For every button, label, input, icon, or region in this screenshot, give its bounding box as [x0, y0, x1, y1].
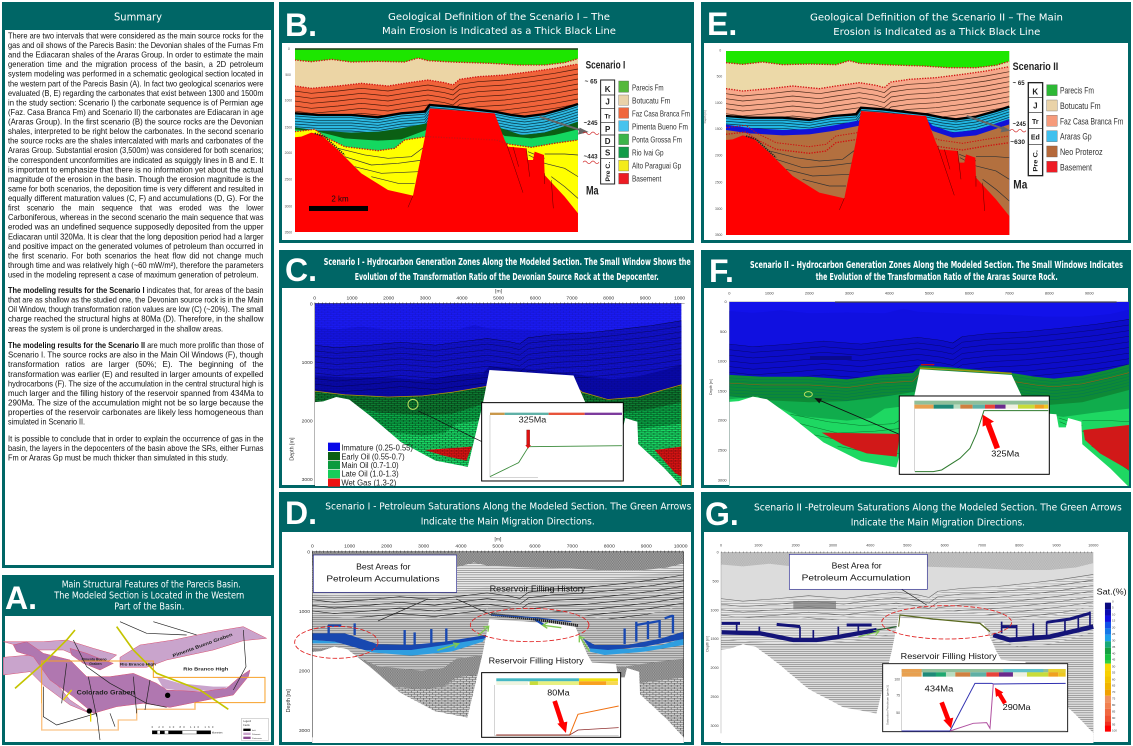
text block: summary paragraph 1: gas and oil shows of the Parecis Basin: the Devonian shales of the Furnas Fm: [8, 41, 264, 50]
map of Parecis Basin: Pimenta Bueno Graben: [172, 632, 233, 658]
overlays on section F: 2000: [718, 418, 727, 423]
overlays on section D: 6000: [529, 544, 541, 550]
legend, scenario II: 1000: [715, 101, 723, 105]
overlays on section C: 0: [310, 301, 313, 307]
overlays on section F: 3000: [845, 291, 855, 296]
overlays on section G: Depth [m]: [706, 636, 710, 652]
text block: summary paragraph 1: magnitude of the erosion in the basin. Though the erosion magnitude is the: [8, 175, 264, 184]
legend, scenario II: 500: [717, 74, 722, 78]
overlays on section D: 7000: [567, 544, 578, 550]
overlays on section F: 1500: [718, 388, 727, 393]
inset: transformation ratio chart C: 325Ma: [519, 414, 546, 424]
heading: panel A: [53, 579, 244, 612]
inset: filling history D: [482, 673, 621, 737]
overlays on section D: Reservoir Filling History: [489, 656, 584, 666]
overlays on section C: 2000: [302, 418, 313, 424]
scale bar and legend, scenario I: Scenario I: [586, 59, 625, 71]
legend, scenario II: Pre C.: [1033, 150, 1040, 172]
overlays on section F: 500: [720, 329, 727, 334]
overlays on section F: 3000: [718, 477, 727, 482]
scale bar and legend, scenario I: Rio Ivai Gp: [632, 147, 664, 157]
overlays on section C: 0: [313, 295, 316, 301]
scale bar and legend, scenario I: 2 km: [331, 195, 349, 204]
legend: saturation colour scale: 50: [1112, 664, 1116, 668]
scale bar and legend, scenario I: Basement: [632, 174, 662, 184]
legend, scenario II: Basement: [1060, 162, 1092, 172]
heading: panel A: Main Structural Features of the Parecis Basin.: [62, 579, 241, 590]
scale bar and legend, scenario I: P: [605, 125, 611, 134]
text block: summary paragraph 1: same for both scenarios, the deposition time is very different and resulted in: [8, 184, 264, 193]
text block: scenario II results: Scenario I. The source rocks are also in the Main Oil Windows (F), though: [8, 351, 264, 360]
overlays on section C: 9000: [640, 295, 651, 301]
text block: scenario I results: charge reached the structural highs at 80Ma (D). Therefore, in the shallow: [8, 315, 264, 324]
heading: panel B: [382, 12, 616, 37]
scale bar and legend, scenario I: J: [605, 98, 610, 107]
inset: filling history G: 434Ma: [925, 684, 954, 694]
reservoir saturation band D: [312, 615, 684, 656]
legend, scenario II: Tr: [1032, 119, 1039, 126]
overlays on section D: 8000: [604, 544, 615, 550]
overlays on section F: 1000: [765, 291, 775, 296]
map of Parecis Basin: kilometers: [212, 732, 223, 735]
scale bar and legend, scenario I: [285, 47, 690, 234]
inset: filling history G: 50: [896, 711, 900, 715]
overlays on section G: Reservoir Filling History: [901, 651, 997, 661]
text block: summary paragraph 1: shales, interpreted to be right below the carbonates. In the second scenario: [8, 127, 264, 136]
legend: maturity: Wet Gas (1.3-2): [341, 479, 397, 488]
text block: summary paragraph 1: system modeling was performed in a schematic geological section located in: [8, 70, 264, 79]
overlays on section G: 8000: [1015, 544, 1023, 548]
overlays on section G: 2500: [711, 695, 719, 699]
text block: summary paragraph 1: Ediacaran until 320Ma. It is clear that the long deposition period had a larger: [8, 232, 264, 241]
legend: saturation colour scale: 70: [1112, 690, 1116, 694]
inset: transformation ratio chart F: 325Ma: [991, 449, 1019, 459]
heading: panel F: [750, 260, 1123, 283]
panel F: generation zones scenario II: [701, 250, 1131, 488]
legend: saturation colour scale: 80: [1112, 703, 1116, 707]
overlays on section F: 0: [724, 299, 727, 304]
panel E: geological definition scenario II: [701, 2, 1131, 242]
legend, scenario II: 3500: [715, 233, 723, 237]
maturity section scenario II: [729, 302, 1129, 486]
overlays on section G: 3000: [829, 544, 837, 548]
reservoir saturation band G: [722, 612, 1093, 640]
scale bar and legend, scenario I: ~ 65: [585, 78, 598, 85]
scale bar and legend, scenario I: Pre C.: [605, 161, 612, 182]
overlays on section G: [706, 544, 1127, 733]
overlays on section C: 6000: [530, 295, 541, 301]
text block: conclusion: [8, 434, 264, 462]
overlays on section F: 9000: [1085, 291, 1095, 296]
panel G: saturations scenario II: [701, 492, 1131, 746]
legend: saturation colour scale: 75: [1112, 697, 1116, 701]
text block: conclusion: It is possible to conclude that in order to explain the occurrence of gas in the: [8, 434, 264, 443]
overlays on section F: 2500: [718, 447, 727, 452]
heading: panel G: Indicate the Main Migration Directions.: [851, 518, 1025, 529]
scale bar and legend, scenario I: Tr: [604, 114, 611, 121]
text block: summary paragraph 1: the correspondent unconformities are indicated as squiggly lines in B and E. It: [8, 156, 264, 165]
inset: filling history G: [883, 664, 1068, 732]
dashed best-area ellipse G: [882, 606, 1012, 639]
text block: summary paragraph 1: the first scenario. For both scenarios the heat flow did not change much: [8, 251, 264, 260]
dashed best-area ellipses D: [295, 608, 589, 658]
text block: summary paragraph 1: (Araras Group). In the first scenario (B) the source rocks are the Devonian: [8, 118, 264, 127]
legend: saturation colour scale: 0: [1112, 599, 1114, 603]
legend: saturation colour scale: 15: [1112, 619, 1116, 623]
text block: summary paragraph 1: equally different maturation values (C, F) and accumulations (D, G). For the: [8, 194, 264, 203]
text block: summary paragraph 1: is important to emphasize that there is no information yet about the actual: [8, 165, 264, 174]
map of Parecis Basin: fault: [252, 729, 256, 732]
panel letter B: B.: [285, 7, 317, 43]
overlays on section F: 7000: [1005, 291, 1015, 296]
scale bar and legend, scenario I: Faz Casa Branca Fm: [632, 109, 690, 119]
heading: panel E: Geological Definition of the Scenario II – The Main: [810, 13, 1063, 24]
scale bar and legend, scenario I: Ponta Grossa Fm: [632, 135, 682, 145]
overlays on section D: Depth [m]: [286, 689, 292, 712]
heading: panel D: [325, 502, 691, 527]
legend: saturation colour scale: 55: [1112, 671, 1116, 675]
overlays on section G: 0: [717, 550, 719, 554]
overlays on section C: 7000: [566, 295, 578, 301]
callout: best area G: Best Area for: [832, 560, 882, 570]
inset: filling history D: 80Ma: [547, 688, 570, 698]
map of Parecis Basin: [3, 622, 268, 741]
overlays on section F: 6000: [965, 291, 975, 296]
text block: conclusion: Fm or Araras Gp must be much thicker than simulated in this study.: [8, 454, 228, 462]
callout: best areas D: Petroleum Accumulations: [326, 574, 440, 584]
inset: filling history G: 290Ma: [1003, 702, 1031, 712]
overlays on section G: 3000: [711, 724, 719, 728]
scale bar and legend, scenario I: 500: [285, 73, 291, 77]
legend: saturation colour scale: 20: [1112, 626, 1116, 630]
overlays on section C: 8000: [603, 295, 614, 301]
text block: scenario I results: Oil Window, though transformation ration values are low (C) (~20%). The small: [8, 305, 264, 314]
text block: summary paragraph 1: eroded was an undefined sequence supposedly deposited from the upper: [8, 223, 264, 232]
legend, scenario II: Depth [m]: [703, 110, 707, 123]
heading: panel A: The Modeled Section is Located in the Western: [53, 590, 244, 601]
scale bar and legend, scenario I: Botucatu Fm: [632, 95, 670, 105]
legend: saturation colour scale: 60: [1112, 677, 1116, 681]
map of Parecis Basin: Paleozoic: [252, 734, 261, 736]
inset: filling history G: 100: [894, 677, 900, 681]
overlays on section D: [286, 536, 688, 737]
legend: saturation colour scale: 5: [1112, 606, 1114, 610]
text block: scenario II results: 290Ma. The size of the accumulation might not be so large because the: [8, 399, 264, 408]
inset: filling history G: 75: [896, 693, 900, 697]
text block: summary paragraph 1: There are two intervals that were considered as the main source rocks for the: [8, 32, 264, 40]
legend: maturity: [328, 443, 413, 488]
legend: saturation colour scale: 45: [1112, 658, 1116, 662]
legend: maturity: Early Oil (0.55-0.7): [341, 452, 405, 461]
text block: summary paragraph 1: the western part of the Parecis Basin (A). In fact two geological scenarios were: [8, 79, 264, 88]
inset: transformation ratio chart F: [899, 396, 1049, 474]
overlays on section D: 0: [307, 550, 310, 556]
text block: summary paragraph 1: generation time and the migration process of the basin, a 2D petroleum: [8, 60, 264, 69]
heading: summary: Summary: [114, 11, 162, 24]
overlays on section G: 5000: [903, 544, 911, 548]
legend: saturation colour scale: Sat.(%): [1097, 586, 1127, 596]
text block: summary paragraph 1: [8, 32, 264, 280]
overlays on section G: 6000: [941, 544, 949, 548]
overlays on section G: 1500: [711, 637, 719, 641]
overlays on section C: 1000: [302, 360, 313, 366]
text block: summary paragraph 1: used in the modeling represent a case of maximum generation of petroleum.: [8, 270, 258, 280]
overlays on section D: Reservoir Filling History: [490, 584, 586, 594]
arrow to inset F: [814, 398, 899, 434]
legend, scenario II: ~245: [1013, 121, 1026, 128]
heading: panel C: Scenario I - Hydrocarbon Generation Zones Along the Modeled Section. The Small Window Shows the: [324, 257, 691, 268]
callout: best area G: [789, 554, 927, 589]
maturity section scenario I: [315, 303, 682, 486]
callout: best areas D: [313, 555, 457, 592]
scale bar and legend, scenario I: 2500: [285, 178, 292, 182]
saturation section scenario I: [312, 552, 684, 746]
scale bar and legend, scenario I: Ma: [586, 183, 599, 197]
overlays on section G: 7000: [978, 544, 986, 548]
overlays on section G: 9000: [1053, 544, 1061, 548]
overlays on section D: 1000: [299, 609, 310, 615]
text block: scenario II results: simulated in Scenario II.: [8, 418, 85, 427]
heading: panel E: [810, 13, 1063, 38]
overlays on section D: 0: [311, 544, 314, 550]
overlays on section G: 500: [713, 579, 719, 583]
map of Parecis Basin: Colorado Graben: [77, 689, 135, 696]
overlays on section G: 4000: [866, 544, 874, 548]
legend: maturity: Main Oil (0.7-1.0): [341, 461, 399, 470]
overlays on section G: 2000: [792, 544, 800, 548]
panel B: geological definition scenario I: [279, 2, 694, 242]
scale bar and legend, scenario I: D: [605, 137, 611, 146]
text block: summary paragraph 1: through time and was relatively high (~60 mW/m²), therefore the parameters: [8, 261, 264, 270]
scale bar and legend, scenario I: S: [605, 149, 611, 158]
overlays on section F: 8000: [1045, 291, 1055, 296]
scale bar and legend, scenario I: Alto Paraguai Gp: [632, 161, 681, 171]
heading: panel B: Geological Definition of the Scenario I – The: [388, 12, 610, 23]
legend, scenario II: ~630: [1010, 139, 1025, 146]
text block: summary paragraph 1: Carboniferous, whereas in the second scenario the main sequence that was: [8, 213, 264, 222]
legend, scenario II: Ma: [1013, 177, 1028, 191]
overlays on section C: 1000: [346, 295, 358, 301]
text block: summary paragraph 1: Araras Group. Substantial erosion (3,500m) was considered for both scenarios;: [8, 146, 264, 155]
overlays on section C: 1000: [674, 295, 685, 301]
overlays on section D: 9000: [641, 544, 652, 550]
green migration arrows D: [437, 622, 590, 652]
scale bar and legend, scenario I: Pimenta Bueno Fm: [632, 122, 688, 132]
panel letter C: C.: [285, 252, 317, 288]
text block: scenario II results: [8, 341, 264, 427]
text block: scenario II results: properties of the reservoir carbonates are likely less homogeneous than: [8, 408, 264, 417]
text block: conclusion: basin, the layers in the depocenters of the basin above the SRs, either Furnas: [8, 444, 264, 453]
legend, scenario II: J: [1033, 101, 1038, 110]
overlays on section D: 3000: [299, 728, 310, 734]
text block: scenario II results: The modeling results for the Scenario II are much more prolific than those of: [8, 341, 264, 350]
legend: saturation colour scale: 65: [1112, 684, 1116, 688]
overlays on section D: 1000: [344, 544, 355, 550]
text block: summary paragraph 1: the source rocks are the shales intercalated with marls and carbonates of the: [8, 137, 264, 146]
panel letter D: D.: [285, 495, 317, 531]
legend, scenario II: ~ 65: [1013, 80, 1025, 87]
heading: panel G: [754, 503, 1122, 529]
panel C: generation zones scenario I: [279, 250, 694, 488]
scale bar and legend, scenario I: Parecis Fm: [632, 82, 664, 92]
text block: scenario II results: transformation ratios are larger (50%; E). The beginning of the: [8, 360, 264, 369]
text block: scenario I results: The modeling results for the Scenario I indicates that, for areas of the basin: [8, 286, 264, 295]
text block: summary paragraph 1: (Faz. Casa Branca Fm) and Scenario II) the carbonates are Ediacaran in age: [8, 108, 264, 117]
inset: transformation ratio chart C: [482, 403, 623, 481]
panel: summary: [2, 2, 274, 566]
text block: scenario I results: areas the system is oil prone is undercharged in the shallow areas.: [8, 324, 223, 333]
legend, scenario II: 3000: [715, 207, 723, 211]
overlays on section F: Depth [m]: [709, 379, 713, 395]
map of Parecis Basin: Legend: [243, 721, 252, 723]
overlays on section G: 2000: [711, 666, 719, 670]
heading: panel D: Indicate the Main Migration Directions.: [421, 516, 595, 527]
legend: saturation colour scale: 95: [1112, 722, 1116, 726]
overlays on section C: 3000: [420, 295, 431, 301]
overlays on section G: 1000: [711, 608, 719, 612]
overlays on section D: 4000: [455, 544, 467, 550]
overlays on section C: 2000: [383, 295, 394, 301]
overlays on section F: 4000: [885, 291, 895, 296]
legend: saturation colour scale: 100: [1112, 729, 1117, 733]
overlays on section G: 10000: [1088, 544, 1098, 548]
callout: best areas D: Best Areas for: [356, 562, 411, 572]
heading: panel C: Evolution of the Transformation Ratio of the Devonian Source Rock at the Depocenter.: [355, 272, 659, 283]
panel letter A: A.: [5, 580, 37, 616]
callout: best area G: Petroleum Accumulation: [802, 573, 911, 583]
legend: saturation colour scale: 85: [1112, 709, 1116, 713]
legend: saturation colour scale: 90: [1112, 716, 1116, 720]
scale bar and legend, scenario I: 0: [288, 47, 290, 51]
overlays on section F: [709, 291, 1129, 482]
legend: saturation colour scale: 25: [1112, 632, 1116, 636]
text block: scenario I results: that are as shallow as the studied one, the Devonian source rock is in the Main: [8, 296, 264, 305]
legend, scenario II: 2000: [715, 154, 723, 158]
legend: saturation colour scale: 30: [1112, 639, 1116, 643]
overlays on section C: [289, 288, 685, 488]
text block: summary paragraph 1: first scenario the main sequence that was eroded was the lower: [8, 204, 264, 213]
panel letter G: G.: [705, 496, 739, 532]
map of Parecis Basin: Pimenta Bueno: [82, 657, 107, 661]
map of Parecis Basin: 0 20 40 80 120 160: [152, 725, 214, 729]
heading: panel C: [324, 257, 691, 283]
overlays on section C: 4000: [456, 295, 468, 301]
legend: saturation colour scale: 10: [1112, 612, 1116, 616]
text block: summary paragraph 1: and the Ediacaran shales of the Araras Group. In order to estimate the main: [8, 51, 264, 60]
scale bar and legend, scenario I: 1500: [285, 125, 292, 129]
map of Parecis Basin: Proterozoic: [252, 737, 262, 740]
legend, scenario II: Scenario II: [1013, 61, 1058, 73]
overlays on section D: 2000: [299, 669, 310, 675]
scale bar and legend, scenario I: 1000: [285, 99, 292, 103]
legend, scenario II: Ed: [1031, 134, 1040, 141]
panel letter E: E.: [707, 6, 737, 42]
overlays on section D: [m]: [495, 536, 502, 542]
scale bar and legend, scenario I: ~245: [584, 120, 598, 127]
overlays on section C: Depth [m]: [289, 437, 295, 461]
overlays on section G: 0: [720, 544, 722, 548]
text block: summary paragraph 1: evaluated (B, E) regarding the carbonates that exist between 1300 and 1500m: [8, 89, 264, 98]
heading: panel E: Erosion is Indicated as a Thick Black Line: [833, 27, 1040, 38]
scale bar and legend, scenario I: 3500: [285, 230, 292, 234]
legend, scenario II: [703, 49, 1123, 237]
geological cross-section scenario II: [726, 51, 1009, 235]
legend, scenario II: 1500: [715, 127, 723, 131]
legend, scenario II: 0: [719, 49, 721, 53]
scale bar and legend, scenario I: K: [605, 85, 611, 94]
legend: maturity: Late Oil (1.0-1.3): [341, 470, 399, 479]
panel D: saturations scenario I: [279, 492, 694, 746]
overlays on section F: 2000: [805, 291, 815, 296]
panel A: structural map: [2, 575, 274, 744]
heading: panel D: Scenario I - Petroleum Saturations Along the Modeled Section. The Green Arrows: [325, 502, 691, 513]
legend: saturation colour scale: 40: [1112, 651, 1116, 655]
text block: summary paragraph 1: in the study section: Scenario I) the carbonate sequence is of Permian age: [8, 98, 264, 107]
inset: filling history G: Saturation Petroleum [gm/m3]: [886, 685, 890, 725]
heading: panel A: Part of the Basin.: [114, 601, 184, 612]
overlays on section C: [m]: [495, 288, 503, 294]
overlays on section D: 5000: [492, 544, 504, 550]
text block: summary paragraph 1: and positive impact on the generated volumes of petroleum than occurred in: [8, 242, 264, 251]
saturation section scenario II: [721, 552, 1093, 746]
map of Parecis Basin: Rio Branco High: [183, 666, 228, 671]
overlays on section C: 5000: [493, 295, 504, 301]
panel letter F: F.: [709, 253, 734, 289]
overlays on section G: 1000: [754, 544, 762, 548]
geological cross-section scenario I: [295, 48, 578, 232]
text block: scenario I results: [8, 286, 264, 333]
overlays on section D: 2000: [381, 544, 392, 550]
legend, scenario II: Neo Proteroz: [1060, 147, 1103, 157]
legend: saturation colour scale: [1097, 586, 1127, 733]
overlays on section D: 3000: [418, 544, 429, 550]
overlays on section F: 0: [728, 291, 731, 296]
legend, scenario II: Botucatu Fm: [1060, 101, 1101, 111]
legend: maturity: Immature (0.25-0.55): [341, 443, 413, 452]
green migration arrow G: [858, 630, 879, 637]
legend, scenario II: K: [1032, 87, 1038, 96]
overlays on section C: 3000: [302, 477, 313, 483]
map of Parecis Basin: Graben: [89, 662, 102, 666]
legend, scenario II: 2500: [715, 180, 723, 184]
arrow to inset C: [418, 411, 482, 442]
legend, scenario II: Parecis Fm: [1060, 86, 1094, 96]
text block: scenario II results: much larger and the filling history of the reservoir spanned from 434Ma to: [8, 389, 264, 398]
scale bar and legend, scenario I: ~443: [584, 153, 598, 160]
map of Parecis Basin: Rio Branco High: [120, 662, 156, 666]
text block: scenario II results: transformation was earlier (E) and resulted in larger amounts of expelled: [8, 370, 264, 379]
scale bar and legend, scenario I: 3000: [285, 204, 292, 208]
heading: panel B: Main Erosion is Indicated as a Thick Black Line: [382, 26, 616, 37]
legend: saturation colour scale: 35: [1112, 645, 1116, 649]
scale bar and legend, scenario I: 2000: [285, 151, 292, 155]
text block: scenario II results: hydrocarbons (F). The size of the accumulation in the central structural high is: [8, 379, 264, 388]
overlays on section F: 5000: [925, 291, 935, 296]
overlays on section F: 1000: [718, 359, 727, 364]
map of Parecis Basin: Faults: [243, 724, 250, 727]
overlays on section D: 10000: [674, 544, 688, 550]
legend, scenario II: Araras Gp: [1060, 132, 1092, 142]
